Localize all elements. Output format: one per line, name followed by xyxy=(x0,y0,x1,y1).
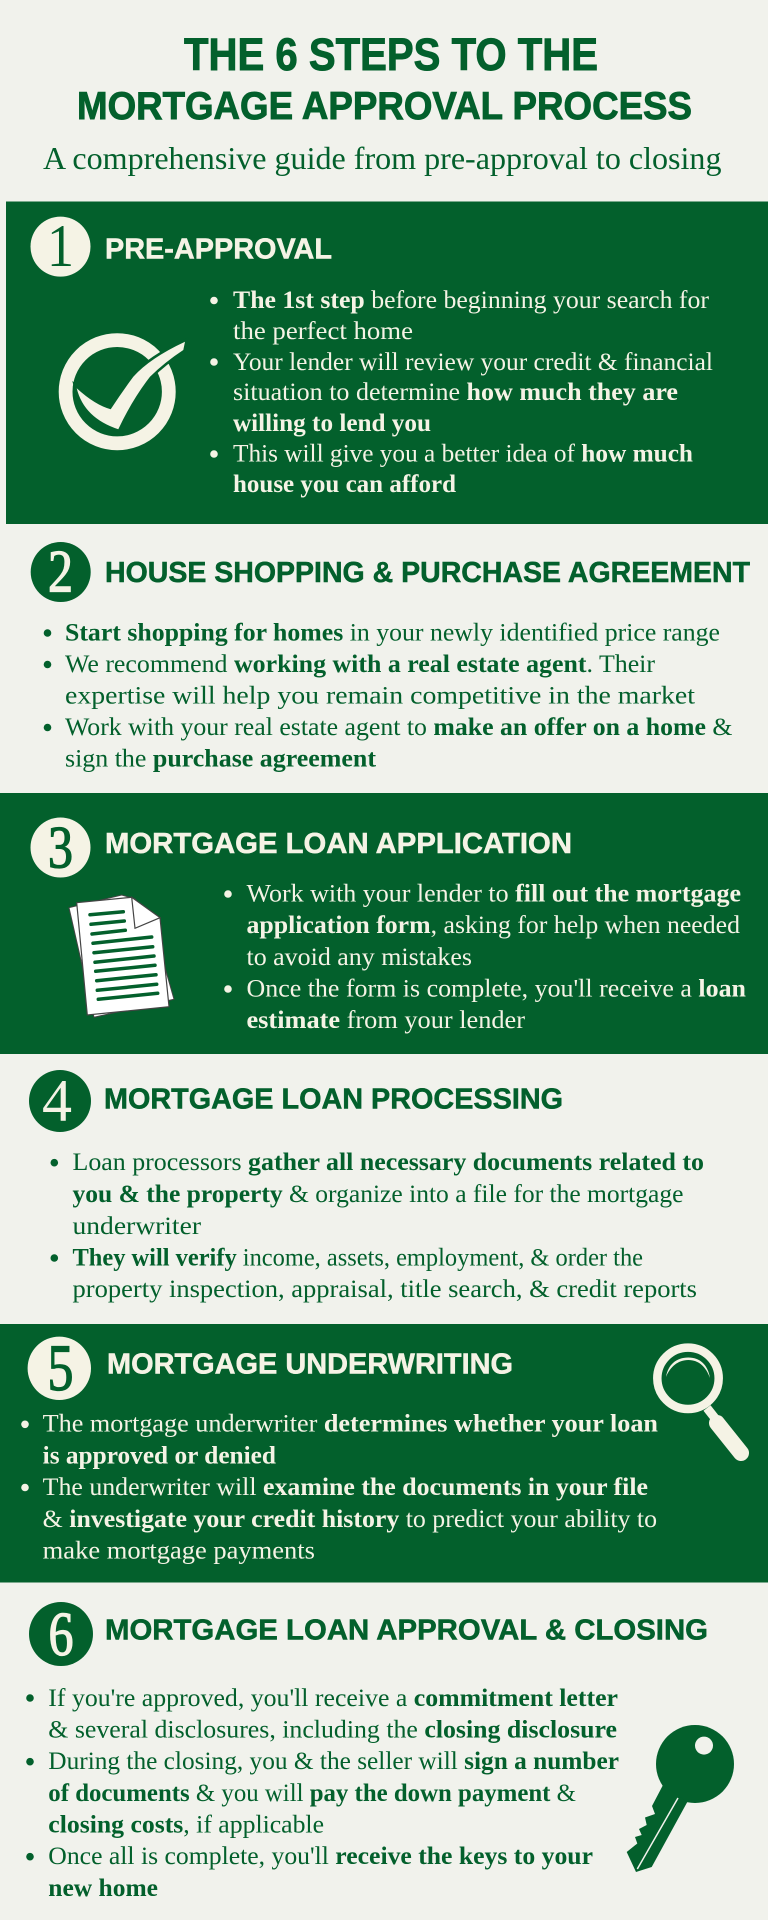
bullet list: step 3: Once the form is complete, you'll receive a loan xyxy=(246,976,746,1003)
bullet list: step 6: of documents & you will pay the down payment & xyxy=(48,1780,576,1807)
number badge 2: 2 xyxy=(48,539,73,605)
number badge 4 xyxy=(29,1068,91,1134)
bullet list: step 2: We recommend working with a real estate agent . Their xyxy=(65,651,656,678)
panel: step 4 loan processing xyxy=(0,1054,768,1324)
bullet list: step 6: closing costs, if applicable xyxy=(48,1812,324,1839)
number badge 6: 6 xyxy=(48,1601,74,1669)
bullet list: step 3: Work with your lender to fill out the mortgage xyxy=(246,881,741,908)
number badge 1: 1 xyxy=(47,213,74,279)
bullet list: step 3: application form, asking for help when needed xyxy=(246,912,741,939)
bullet list: step 1: house you can afford xyxy=(233,471,456,498)
bullet list: step 4: Loan processors gather all necessary documents related to xyxy=(72,1149,704,1176)
number badge 3: 3 xyxy=(48,814,73,880)
bullet list: step 5: make mortgage payments xyxy=(43,1538,315,1564)
number badge 2 xyxy=(31,539,91,605)
panel: step 2 house shopping xyxy=(0,524,768,793)
bullet list: step 6: If you're approved, you'll receive a commitment letter xyxy=(48,1685,618,1712)
heading: approval and closing: MORTGAGE LOAN APPROVAL & CLOSING xyxy=(105,1614,708,1646)
panel: step 6 approval and closing xyxy=(0,1582,768,1920)
number badge 6 xyxy=(29,1601,93,1669)
bullet list: step 6: new home xyxy=(48,1875,158,1902)
bullet list: step 3 xyxy=(224,881,746,1034)
bullet list: step 5: is approved or denied xyxy=(43,1442,276,1470)
bullet list: step 6: & several disclosures, including the closing disclosure xyxy=(48,1717,617,1744)
number badge 5: 5 xyxy=(48,1332,74,1405)
icon: check mark in circle xyxy=(66,340,185,443)
bullet list: step 2: expertise will help you remain competitive in the market xyxy=(65,682,695,710)
heading: loan processing: MORTGAGE LOAN PROCESSING xyxy=(104,1083,563,1115)
bullet list: step 5: & investigate your credit history to predict your ability to xyxy=(43,1506,657,1533)
bullet list: step 3: to avoid any mistakes xyxy=(246,944,472,971)
panel: step 1 pre-approval xyxy=(6,202,768,524)
bullet list: step 4: property inspection, appraisal, title search, & credit reports xyxy=(72,1276,697,1303)
number badge 5 xyxy=(28,1332,91,1405)
subtitle: A comprehensive guide from pre-approval to closing xyxy=(43,140,722,176)
panel: step 3 loan application xyxy=(0,793,768,1054)
bullet list: step 1: the perfect home xyxy=(233,318,413,345)
bullet list: step 6 xyxy=(26,1685,619,1902)
bullet list: step 4: underwriter xyxy=(72,1213,202,1240)
bullet list: step 6: Once all is complete, you'll receive the keys to your xyxy=(48,1843,593,1870)
number badge 1 xyxy=(30,213,90,279)
bullet list: step 3: estimate from your lender xyxy=(246,1007,526,1034)
bullet list: step 1: willing to lend you xyxy=(233,410,431,437)
bullet list: step 4: They will verify income, assets, employment, & order the xyxy=(72,1244,643,1272)
bullet list: step 5: The underwriter will examine the documents in your file xyxy=(43,1474,648,1501)
number badge 4: 4 xyxy=(42,1068,72,1134)
heading: house shopping: HOUSE SHOPPING & PURCHASE AGREEMENT xyxy=(105,557,750,589)
bullet list: step 4 xyxy=(50,1149,704,1303)
bullet list: step 2 xyxy=(44,620,732,772)
icon: magnifying glass xyxy=(657,1348,741,1453)
bullet list: step 1: Your lender will review your credit & financial xyxy=(233,349,713,376)
bullet list: step 1: situation to determine how much they are xyxy=(233,379,678,406)
heading: loan application: MORTGAGE LOAN APPLICATION xyxy=(105,828,572,860)
title line 2: MORTGAGE APPROVAL PROCESS xyxy=(77,85,692,128)
title line 1: THE 6 STEPS TO THE xyxy=(184,29,598,80)
icon: document xyxy=(69,895,174,1017)
title block xyxy=(43,29,722,176)
icon: key xyxy=(627,1725,734,1872)
bullet list: step 1 xyxy=(210,287,713,498)
bullet list: step 1: This will give you a better idea of how much xyxy=(233,440,693,468)
heading: underwriting: MORTGAGE UNDERWRITING xyxy=(107,1348,513,1380)
bullet list: step 2: sign the purchase agreement xyxy=(65,746,377,772)
panel: step 5 underwriting xyxy=(0,1324,768,1582)
bullet list: step 6: During the closing, you & the seller will sign a number xyxy=(48,1748,619,1775)
bullet list: step 1: The 1st step before beginning your search for xyxy=(233,287,710,314)
bullet list: step 2: Work with your real estate agent to make an offer on a home & xyxy=(65,714,732,741)
bullet list: step 2: Start shopping for homes in your newly identified price range xyxy=(65,620,720,646)
number badge 3 xyxy=(30,814,90,880)
bullet list: step 5 xyxy=(21,1411,658,1564)
heading: pre-approval: PRE-APPROVAL xyxy=(105,234,332,266)
bullet list: step 5: The mortgage underwriter determines whether your loan xyxy=(43,1411,658,1438)
bullet list: step 4: you & the property & organize into a file for the mortgage xyxy=(72,1181,684,1208)
